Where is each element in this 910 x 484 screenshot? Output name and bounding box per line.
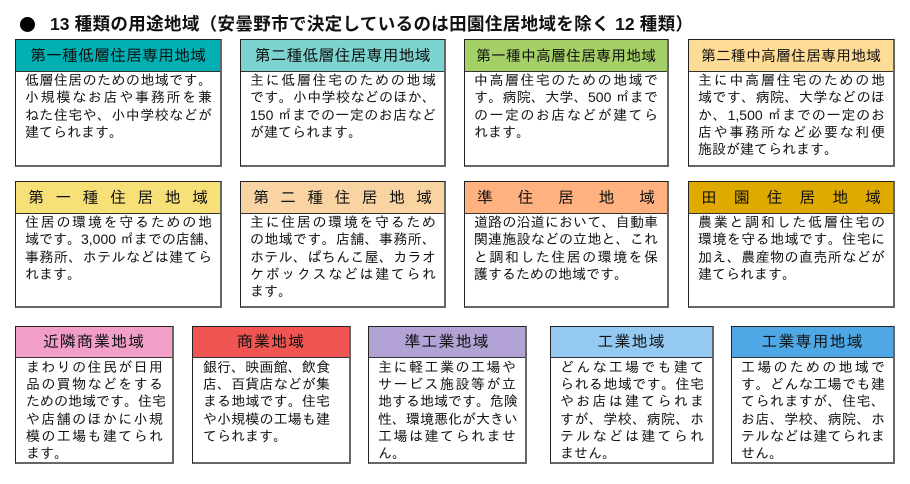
text block: ねた住宅や、小中学校などが bbox=[25, 107, 212, 123]
text block: か、1,500 ㎡までの一定のお bbox=[698, 107, 885, 123]
text block: す。病院、大学、500 ㎡まで bbox=[474, 89, 658, 105]
text block: 住居の環境を守るための地 bbox=[25, 214, 212, 230]
heading: 商業地域 bbox=[237, 334, 305, 351]
text block bbox=[250, 72, 436, 140]
panel: 工業専用地域 bbox=[731, 326, 895, 464]
text block: 店、百貨店などが集 bbox=[203, 376, 330, 392]
text block: や小規模の工場も建 bbox=[203, 411, 330, 427]
text block: 事務所、ホテルなどは建てら bbox=[25, 249, 212, 265]
heading: 第二種住居地域 bbox=[253, 190, 432, 207]
text block: お店、学校、病院、ホ bbox=[741, 411, 885, 427]
panel: 準住居地域 bbox=[464, 181, 669, 308]
text block: の地域です。店舗、事務所、 bbox=[250, 231, 436, 247]
heading: 工業地域 bbox=[598, 334, 666, 351]
heading bbox=[16, 182, 220, 214]
heading bbox=[241, 40, 444, 72]
text block: られる地域です。住宅 bbox=[560, 376, 704, 392]
text block: せん。 bbox=[741, 445, 783, 461]
text block: 農業と調和した低層住宅の bbox=[698, 214, 885, 230]
heading: 工業専用地域 bbox=[762, 334, 864, 351]
text block: すが、学校、病院、ホ bbox=[560, 411, 704, 427]
text block: れます。 bbox=[474, 124, 530, 140]
panel: 第一種低層住居専用地域 bbox=[15, 39, 222, 167]
text block: 域です、病院、大学などのほ bbox=[698, 89, 885, 105]
text block bbox=[698, 214, 885, 282]
text block bbox=[560, 359, 704, 461]
text block: ん。 bbox=[378, 445, 406, 461]
heading bbox=[465, 182, 667, 214]
text block: てられます。 bbox=[203, 428, 287, 444]
text block: 主に低層住宅のための地域 bbox=[250, 72, 436, 88]
text block: サービス施設等が立 bbox=[378, 376, 516, 392]
text block: 加え、農産物の直売所などが bbox=[698, 249, 885, 265]
heading: 第一種住居地域 bbox=[28, 190, 208, 207]
text block: やお店は建てられま bbox=[560, 393, 704, 409]
text block: ホテル、ぱちんこ屋、カラオ bbox=[250, 249, 436, 265]
heading bbox=[465, 40, 667, 72]
panel: 準工業地域 bbox=[368, 326, 527, 464]
text block: れます。 bbox=[25, 266, 81, 282]
heading: 近隣商業地域 bbox=[43, 334, 145, 351]
text block bbox=[25, 72, 212, 140]
panel: 工業地域 bbox=[550, 326, 714, 464]
text block: 主に中高層住宅のための地 bbox=[698, 72, 885, 88]
heading bbox=[689, 40, 893, 72]
text block: てられますが、住宅、 bbox=[741, 393, 885, 409]
text block: テルなどは建てられ bbox=[560, 428, 704, 444]
heading bbox=[241, 182, 444, 214]
heading: 田園住居地域 bbox=[701, 190, 881, 207]
panel: 田園住居地域 bbox=[688, 181, 895, 308]
text block bbox=[741, 359, 885, 461]
text block bbox=[203, 359, 330, 444]
text block: テルなどは建てられま bbox=[741, 428, 885, 444]
heading bbox=[369, 327, 525, 358]
heading bbox=[732, 327, 893, 358]
text block: 150 ㎡までの一定のお店など bbox=[250, 107, 436, 123]
panel: 第一種住居地域 bbox=[15, 181, 222, 308]
text block: 性、環境悪化が大きい bbox=[378, 411, 518, 427]
text block: 地する地域です。危険 bbox=[378, 393, 518, 409]
text block: 模の工場も建てられ bbox=[26, 428, 163, 444]
heading: 第二種中高層住居専用地域 bbox=[701, 48, 881, 65]
text block: 環境を守る地域です。住宅に bbox=[698, 231, 885, 247]
text block: ません。 bbox=[560, 445, 616, 461]
text block: 施設が建てられます。 bbox=[698, 141, 838, 157]
text block: 工場は建てられませ bbox=[378, 428, 516, 444]
text block: ケボックスなどは建てられ bbox=[250, 266, 436, 282]
title: 13 種類の用途地域（安曇野市で決定しているのは田園住居地域を除く 12 種類） bbox=[50, 14, 693, 34]
panel: 第二種低層住居専用地域 bbox=[240, 39, 446, 167]
text block: 低層住居のための地域です。 bbox=[25, 72, 212, 88]
text block: です。小中学校などのほか、 bbox=[250, 89, 436, 105]
heading bbox=[689, 182, 893, 214]
text block bbox=[26, 359, 166, 461]
text block: ための地域です。住宅 bbox=[26, 393, 166, 409]
panel: 第二種中高層住居専用地域 bbox=[688, 39, 895, 167]
text block bbox=[474, 214, 658, 282]
panel: 第一種中高層住居専用地域 bbox=[464, 39, 669, 167]
text block: 護するための地域です。 bbox=[474, 266, 628, 282]
heading bbox=[551, 327, 712, 358]
panel: 商業地域 bbox=[192, 326, 351, 464]
text block: 建てられます。 bbox=[25, 124, 123, 140]
heading: 準工業地域 bbox=[404, 334, 490, 351]
text block: ます。 bbox=[26, 445, 68, 461]
text block bbox=[25, 214, 218, 282]
title bullet bbox=[20, 17, 35, 32]
text block: 関連施設などの立地と、これ bbox=[474, 231, 658, 247]
text block: 中高層住宅のための地域で bbox=[474, 72, 658, 88]
text block bbox=[698, 72, 885, 157]
text block bbox=[474, 72, 658, 140]
text block: す。どんな工場でも建 bbox=[741, 376, 885, 392]
heading bbox=[193, 327, 349, 358]
text block: 域です。3,000 ㎡までの店舗、 bbox=[25, 231, 218, 247]
text block: 主に軽工業の工場や bbox=[378, 359, 516, 375]
text block: 工場のための地域で bbox=[741, 359, 885, 375]
text block: 道路の沿道において、自動車 bbox=[474, 214, 658, 230]
heading bbox=[16, 327, 172, 358]
text block: 品の買物などをする bbox=[26, 376, 163, 392]
text block: 小規模なお店や事務所を兼 bbox=[25, 89, 212, 105]
text block: 建てられます。 bbox=[698, 266, 796, 282]
text block: と調和した住居の環境を保 bbox=[474, 249, 658, 265]
panel: 第二種住居地域 bbox=[240, 181, 446, 308]
heading: 第二種低層住居専用地域 bbox=[254, 48, 430, 65]
text block: ます。 bbox=[250, 283, 292, 299]
text block bbox=[250, 214, 436, 299]
text block: 銀行、映画館、飲食 bbox=[203, 359, 330, 375]
heading: 第一種中高層住居専用地域 bbox=[476, 48, 656, 65]
text block: や店舗のほかに小規 bbox=[26, 411, 163, 427]
panel: 近隣商業地域 bbox=[15, 326, 174, 464]
text block: どんな工場でも建て bbox=[560, 359, 704, 375]
text block: まわりの住民が日用 bbox=[26, 359, 163, 375]
text block bbox=[378, 359, 518, 461]
text block: まる地域です。住宅 bbox=[203, 393, 330, 409]
text block: の一定のお店などが建てら bbox=[474, 107, 658, 123]
heading: 第一種低層住居専用地域 bbox=[30, 48, 206, 65]
heading bbox=[16, 40, 220, 72]
text block: 主に住居の環境を守るため bbox=[250, 214, 436, 230]
text block: 店や事務所など必要な利便 bbox=[698, 124, 885, 140]
heading: 準住居地域 bbox=[477, 190, 655, 207]
text block: が建てられます。 bbox=[250, 124, 362, 140]
